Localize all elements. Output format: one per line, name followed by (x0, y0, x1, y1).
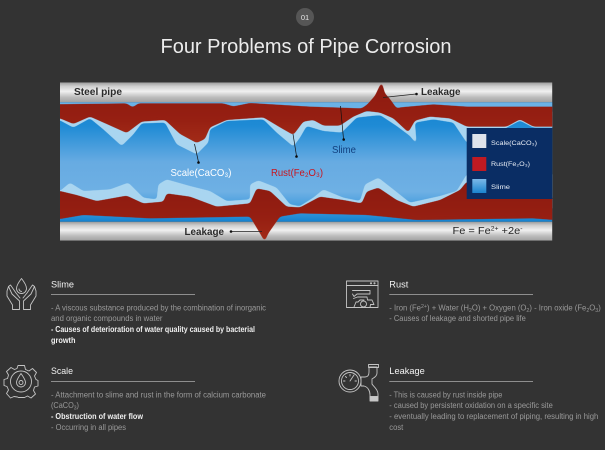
text: scale description: - Obstruction of water flow (51, 412, 144, 421)
title: Four Problems of Pipe Corrosion (160, 36, 452, 58)
thin slime film under top wall (60, 102, 552, 116)
text: scale description: ) (77, 401, 79, 410)
label: rust with leader: Rust(Fe₂O₃) (271, 167, 323, 179)
section number badge: 01 (301, 13, 309, 22)
text: rust description: - Iron (Fe (389, 304, 422, 312)
text: slime description (51, 304, 266, 345)
rust deposit bottom (50, 182, 563, 242)
label: slime with leader (332, 106, 356, 156)
text: rust description: ) + Water (H (427, 304, 469, 312)
legend item: scale: Scale(CaCO₃) (491, 140, 537, 147)
panel: leakage (339, 364, 598, 432)
label: corrosion equation: 2+ (491, 226, 499, 232)
text: leakage description: - eventually leading to replacement of piping, resulting in high (389, 412, 598, 421)
icon: hands holding water drop (7, 278, 36, 310)
pipe corrosion diagram (50, 82, 563, 242)
panel: scale (4, 366, 267, 432)
legend (467, 128, 552, 199)
text: rust description: 3 (595, 308, 598, 314)
text: scale description (51, 390, 267, 432)
text: scale description: - Occurring in all pipes (51, 423, 126, 432)
water and slime layer (60, 102, 552, 222)
icon: browser window with wrench and gear (346, 281, 378, 308)
heading: scale: Scale (51, 366, 73, 377)
heading: slime: Slime (51, 280, 74, 290)
text: rust description: - Causes of leakage and shorted pipe life (389, 314, 526, 323)
top steel pipe wall (60, 82, 552, 102)
bottom steel pipe wall (60, 222, 552, 241)
legend item: slime: Slime (491, 184, 510, 191)
text: slime description: growth (51, 336, 76, 345)
label: rust with leader (271, 134, 323, 179)
label: top leakage with leader: Leakage (421, 87, 461, 98)
text: rust description: O) + Oxygen (O (472, 304, 526, 312)
label: scale with leader (170, 144, 232, 179)
label: scale with leader: Scale(CaCO₃) (170, 167, 232, 179)
label: corrosion equation: Fe = Fe (452, 225, 489, 237)
heading: leakage: Leakage (389, 366, 425, 377)
heading: rust: Rust (389, 280, 409, 290)
text: scale description: - Attachment to slime and rust in the form of calcium carbonate (51, 390, 267, 400)
text: rust description: ) - Iron oxide (Fe (529, 304, 587, 312)
scale deposit bottom (50, 174, 563, 208)
text: leakage description: - This is caused by rust inside pipe (389, 390, 503, 400)
text: slime description: - Causes of deterioration of water quality caused by bacterial (51, 325, 255, 334)
panel: rust (346, 280, 601, 323)
label: corrosion equation: +2e (499, 225, 520, 237)
text: rust description: O (589, 304, 595, 312)
label: slime with leader: Slime (332, 144, 356, 156)
text: rust description: 2 (586, 308, 589, 314)
text: rust description: 2+ (421, 304, 427, 310)
panel: slime (7, 278, 266, 345)
text: leakage description: - caused by persistent oxidation on a specific site (389, 401, 553, 410)
text: rust description: 2 (526, 308, 529, 314)
text: leakage description (389, 390, 598, 432)
text: rust description: 2 (469, 308, 472, 314)
legend item: rust: Rust(Fe₂O₃) (491, 161, 530, 168)
icon: gear with water drop (4, 366, 38, 398)
text: rust description (389, 304, 601, 323)
scale deposit top (50, 112, 563, 154)
icon: pressure gauge on pipe (339, 364, 378, 401)
label: bottom leakage with leader (184, 227, 262, 238)
label: corrosion equation: - (520, 226, 522, 232)
label: top leakage with leader (383, 87, 461, 98)
text: leakage description: cost (389, 423, 404, 432)
label: steel pipe: Steel pipe (74, 87, 122, 98)
text: scale description: (CaCO (51, 401, 76, 410)
rust deposit top (50, 82, 563, 143)
text: slime description: and organic compounds in water (51, 314, 163, 323)
text: scale description: 3 (74, 406, 77, 412)
text: rust description: ) (598, 304, 601, 312)
text: slime description: - A viscous substance produced by the combination of inorganic (51, 304, 266, 312)
label: bottom leakage with leader: Leakage (184, 227, 224, 238)
section number badge (296, 8, 314, 26)
